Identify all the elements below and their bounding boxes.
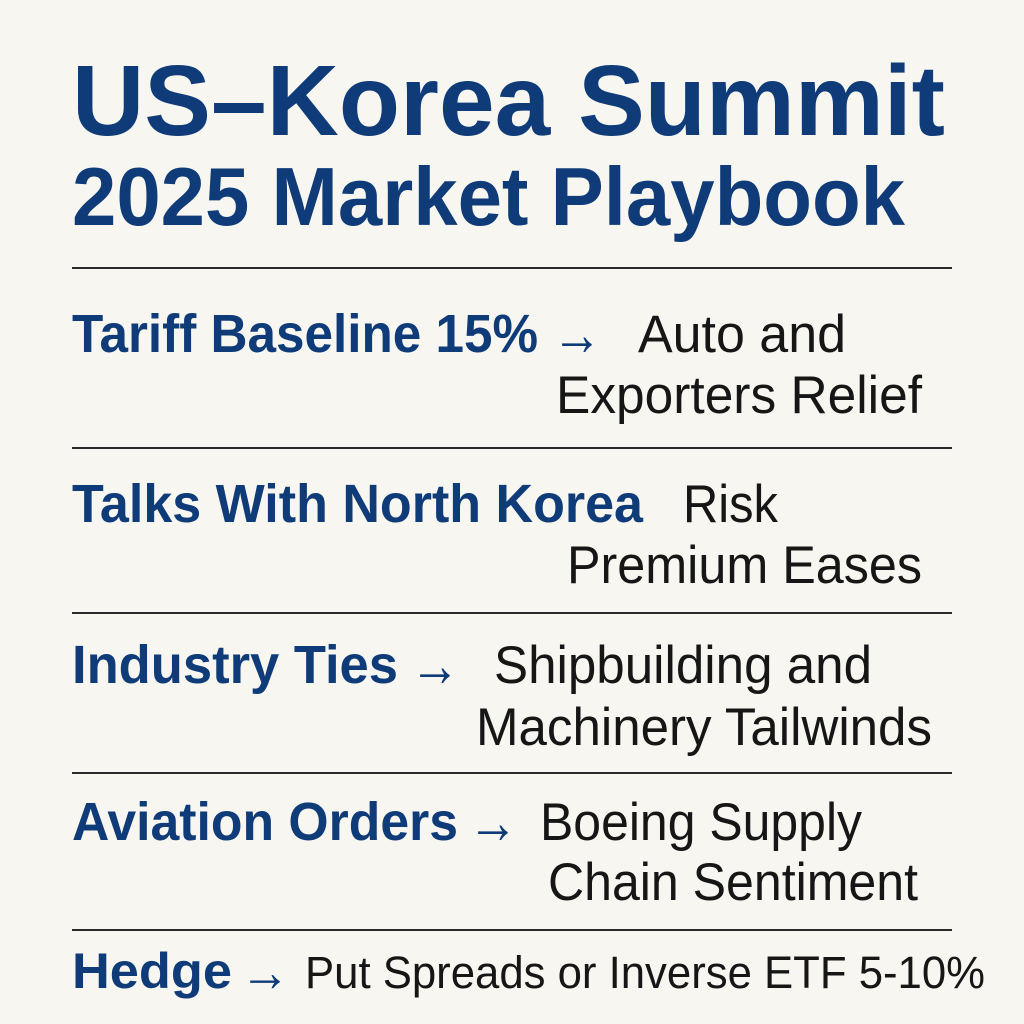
arrow: aviation: → xyxy=(468,788,518,857)
row: industry ties xyxy=(72,631,932,757)
title xyxy=(72,45,945,243)
row: aviation orders: Chain Sentiment xyxy=(548,853,918,912)
row: tariff baseline: Auto and xyxy=(638,305,846,364)
title: US–Korea Summit xyxy=(72,45,945,157)
row: tariff baseline: Exporters Relief xyxy=(556,366,922,425)
arrow: industry: → xyxy=(410,631,460,700)
arrow: tariff: → xyxy=(552,300,602,369)
row: talks with north korea xyxy=(72,474,922,595)
row: industry ties: Machinery Tailwinds xyxy=(476,698,932,757)
arrow: hedge: → xyxy=(240,940,290,1003)
row: aviation orders xyxy=(72,788,918,912)
row: hedge: Put Spreads or Inverse ETF 5-10% xyxy=(305,947,985,998)
row: talks with north korea: Premium Eases xyxy=(567,536,922,595)
row: tariff baseline: Tariff Baseline 15% xyxy=(72,304,538,364)
row: aviation orders: Boeing Supply xyxy=(540,793,862,852)
row: talks with north korea: Talks With North Korea xyxy=(72,474,644,534)
row: hedge xyxy=(72,940,985,1003)
row: industry ties: Shipbuilding and xyxy=(494,636,872,695)
row: aviation orders: Aviation Orders xyxy=(72,792,458,852)
row: tariff baseline xyxy=(72,300,922,425)
row: talks with north korea: Risk xyxy=(683,475,778,534)
row: industry ties: Industry Ties xyxy=(72,635,398,695)
row: hedge: Hedge xyxy=(72,943,232,999)
title: 2025 Market Playbook xyxy=(72,150,906,243)
